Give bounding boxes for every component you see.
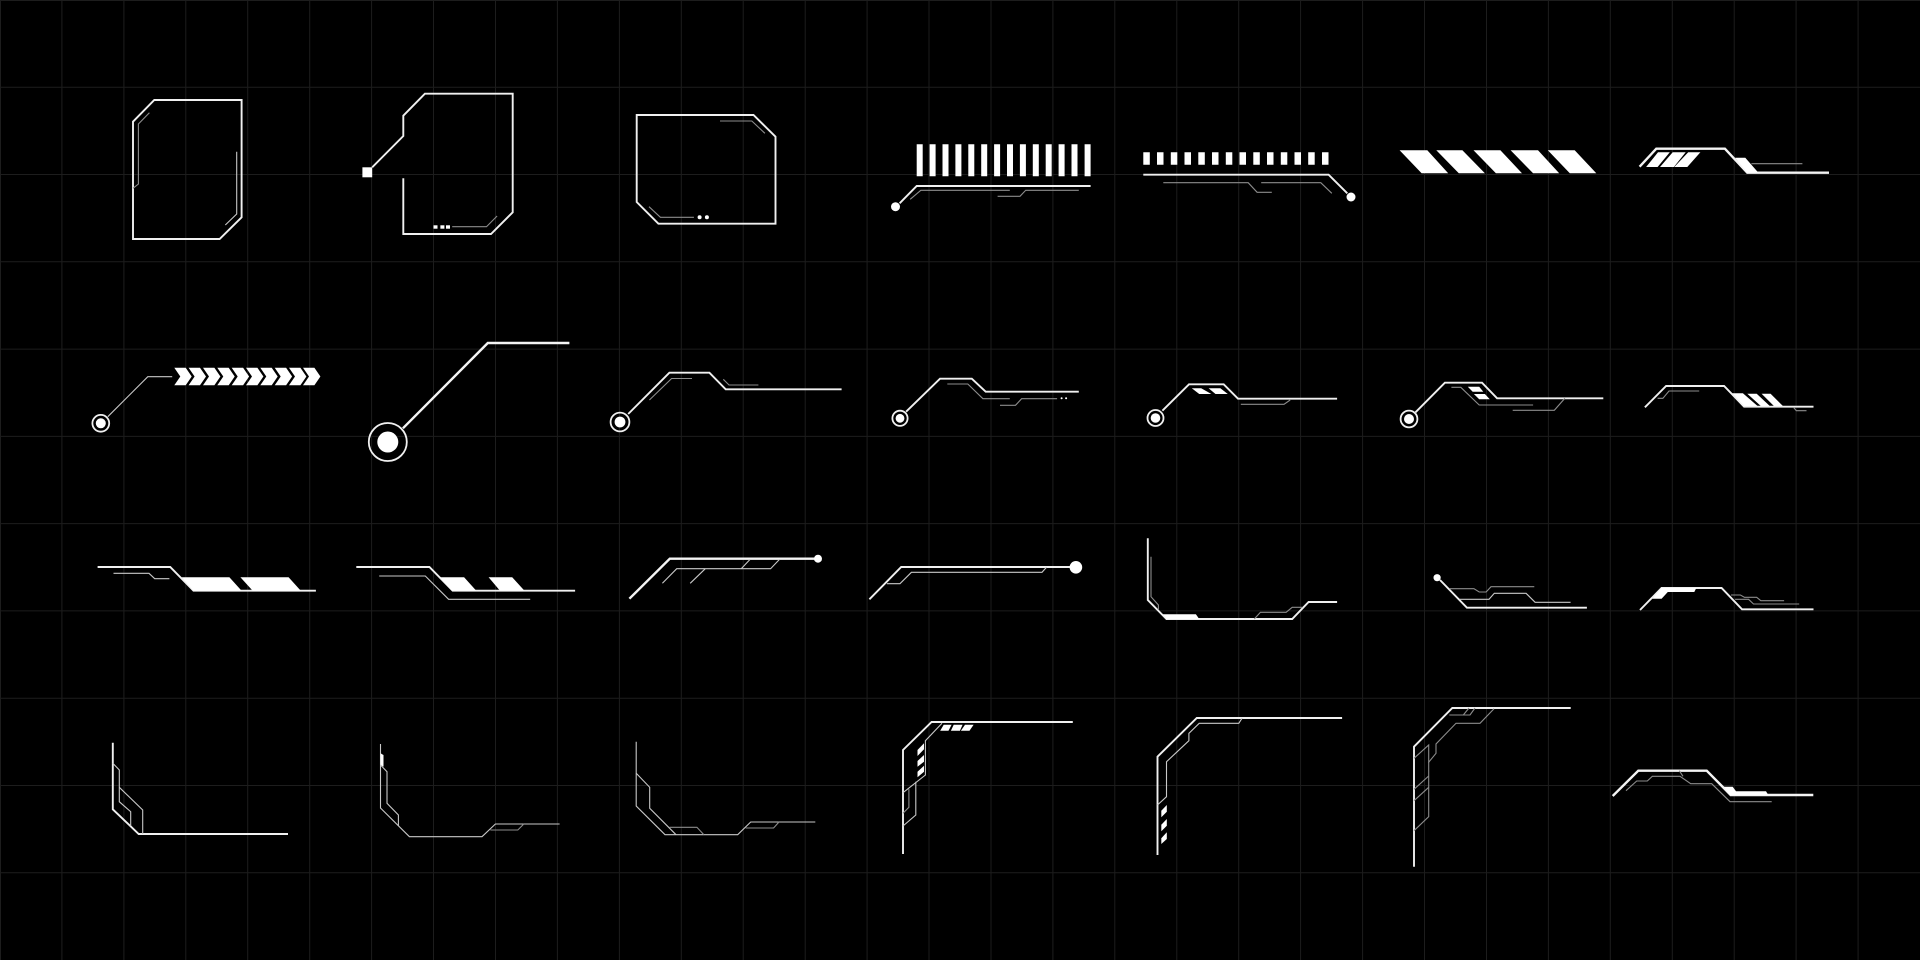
callout: stepped line with three stripes — [1640, 149, 1829, 173]
frame 2: open frame with square node — [362, 94, 513, 234]
frame 3: landscape chamfered frame — [637, 115, 776, 224]
callout: ring node with stepped line — [611, 373, 842, 431]
corner bracket with filled step — [1148, 538, 1337, 619]
corner bracket: stepped end with traces — [636, 742, 815, 835]
corner bracket: top-left with lower blocks — [1158, 718, 1342, 855]
callout: tall bars with node — [891, 144, 1091, 211]
callout: stepped line with stripes — [1645, 386, 1814, 411]
callout: large ring node — [369, 343, 569, 461]
callout: stepped line with thick corner — [1640, 588, 1814, 610]
slanted stripe bar — [1400, 150, 1596, 173]
callout: short bars with node — [1143, 152, 1356, 202]
callout: line with two wide blocks — [98, 567, 316, 591]
callout: node with circuit traces — [1434, 574, 1587, 608]
callout: ring node with two parallelograms — [1148, 384, 1337, 426]
callout: ring node with chevron arrow bar — [92, 368, 320, 432]
callout: double line with large end node — [869, 561, 1082, 599]
corner bracket: left with inner traces — [113, 743, 288, 834]
corner bracket: top-left with small blocks — [903, 722, 1073, 854]
callout: rising line with end node — [629, 555, 822, 599]
callout: ring node with stacked blocks — [1401, 383, 1603, 427]
callout: stepped line with thick tail — [1613, 771, 1813, 802]
callout: ring node with dots — [892, 379, 1079, 426]
corner bracket: stepped end with small block — [380, 744, 560, 837]
frame 1: portrait chamfered frame — [133, 100, 242, 239]
corner bracket: top-left with ladder traces — [1414, 708, 1571, 867]
callout: line with two short blocks — [356, 567, 575, 599]
